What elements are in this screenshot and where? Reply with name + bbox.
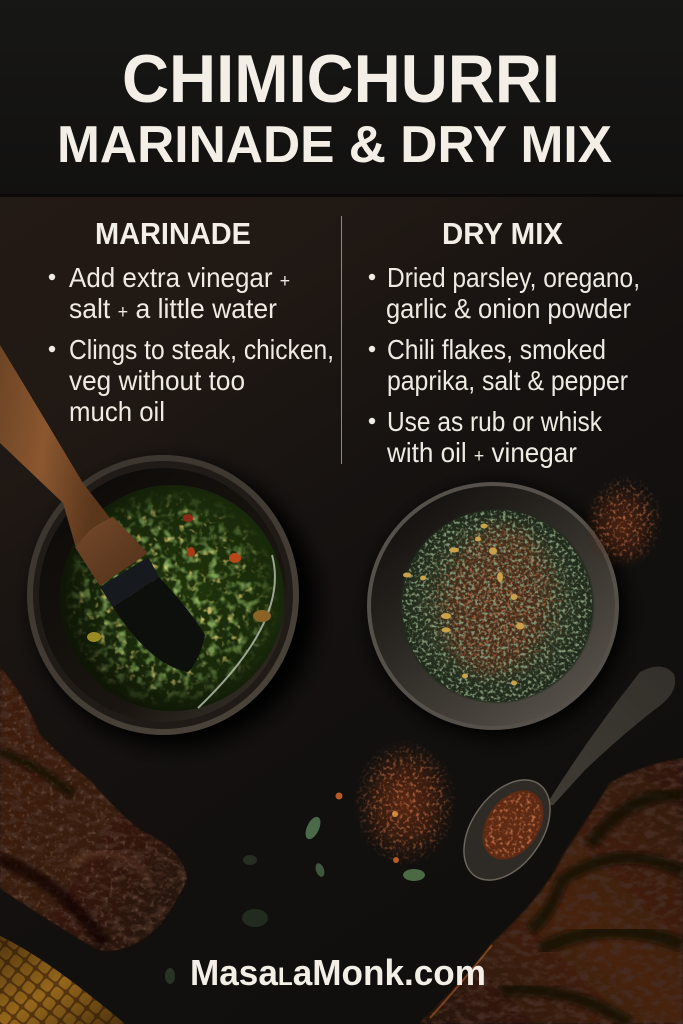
marinade bullet list: much oil (69, 396, 165, 427)
brush ferrule (75, 517, 148, 586)
header band (0, 0, 683, 197)
dry mix bullet list: Chili flakes, smoked (387, 334, 606, 365)
panel: dry mix text (369, 216, 640, 468)
marinade bullet list: Add extra vinegar + (69, 262, 290, 293)
dry mix bullet list: paprika, salt & pepper (387, 365, 628, 396)
marinade bullet list: Clings to steak, chicken, (69, 334, 334, 365)
dry mix bullet list: Dried parsley, oregano, (387, 262, 640, 293)
dry mix bowl (367, 482, 626, 737)
chimichurri liquid (60, 485, 284, 711)
dry mix bullet list: Use as rub or whisk (387, 406, 603, 437)
dry mix bullet list (369, 262, 640, 468)
website footer: MasaLaMonk.com (190, 952, 486, 993)
herb flakes (165, 815, 326, 984)
brush handle (0, 345, 110, 548)
heading: marinade: MARINADE (95, 216, 251, 251)
title: CHIMICHURRI (122, 41, 560, 117)
column divider (341, 216, 342, 464)
marinade bullet list: veg without too (69, 365, 245, 396)
grilled corn (0, 936, 125, 1024)
dry mix bullet list: with oil + vinegar (386, 437, 577, 468)
panel: marinade text (49, 216, 334, 427)
grilled steak left (0, 668, 187, 951)
basting brush (0, 345, 205, 672)
chili scatter top right (584, 474, 663, 570)
marinade bullet list (49, 262, 334, 427)
dry spice mix (399, 508, 595, 704)
brush bristles (113, 577, 205, 672)
marinade bullet list: salt + a little water (69, 293, 277, 324)
marinade bowl (27, 455, 317, 747)
grilled steak right (418, 758, 683, 1024)
brush band (100, 557, 159, 607)
heading: dry mix: DRY MIX (442, 216, 563, 251)
dry mix bullet list: garlic & onion powder (386, 293, 631, 324)
title (57, 41, 612, 174)
title: MARINADE & DRY MIX (57, 116, 612, 174)
spoon (446, 666, 675, 896)
chili scatter centre (336, 739, 457, 881)
